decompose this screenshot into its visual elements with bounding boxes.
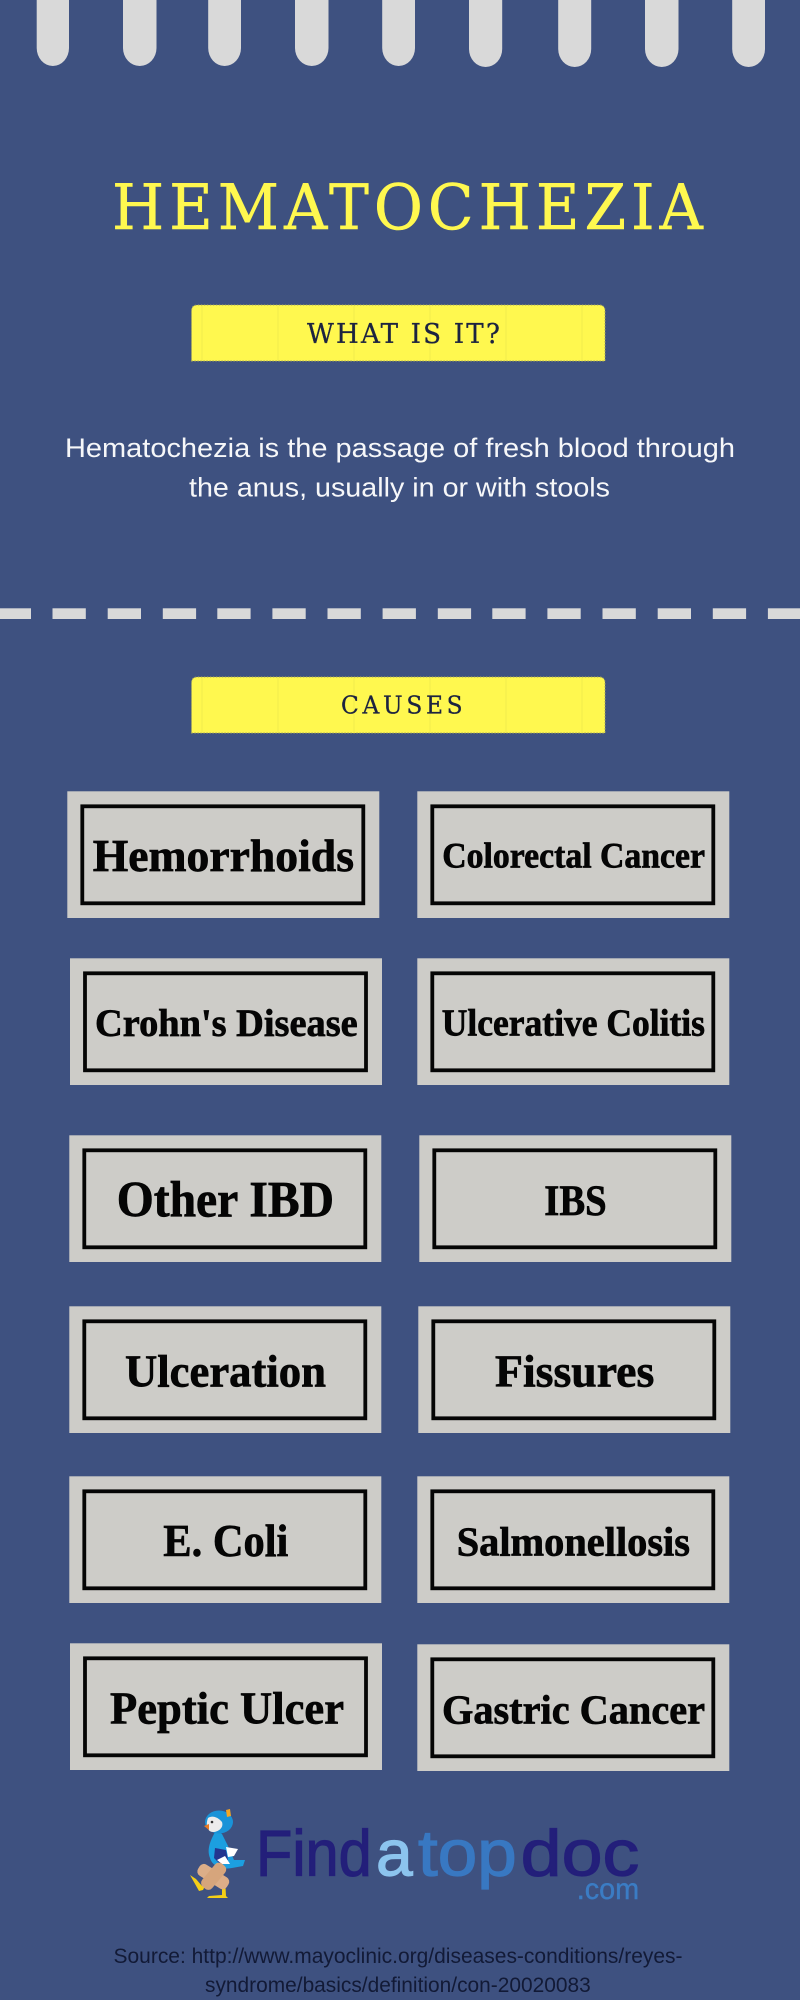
icon: bird mascot with bandage (190, 1809, 245, 1898)
card label: Salmonellosis (457, 1518, 690, 1564)
definition text: the anus, usually in or with stools (189, 472, 610, 502)
card: Ulceration (69, 1306, 381, 1433)
card label: Peptic Ulcer (110, 1682, 344, 1733)
card: Salmonellosis (417, 1476, 729, 1603)
card label: IBS (544, 1178, 607, 1225)
card label: Ulcerative Colitis (442, 1003, 705, 1045)
logo wordmark: Find (256, 1817, 372, 1890)
definition text (65, 433, 735, 502)
source citation: Source: http://www.mayoclinic.org/diseases-conditions/reyes- (114, 1945, 683, 1968)
card label: Crohn's Disease (95, 1002, 358, 1045)
card: Gastric Cancer (417, 1644, 729, 1771)
card label: Colorectal Cancer (442, 836, 705, 876)
card label: Ulceration (125, 1345, 326, 1396)
card: Colorectal Cancer (417, 791, 729, 918)
card: Crohn's Disease (70, 958, 382, 1085)
banner label: WHAT IS IT? (307, 318, 500, 350)
card label: Gastric Cancer (442, 1686, 705, 1732)
card: IBS (419, 1135, 731, 1262)
card: Hemorrhoids (67, 791, 379, 918)
logo wordmark: a (376, 1817, 414, 1890)
definition text: Hematochezia is the passage of fresh blood through (65, 433, 735, 463)
card: Ulcerative Colitis (417, 958, 729, 1085)
source citation: syndrome/basics/definition/con-20020083 (205, 1974, 591, 1997)
card label: Other IBD (117, 1173, 334, 1229)
banner: what is it (192, 305, 605, 361)
notebook binding tabs (37, 0, 765, 67)
card: Other IBD (69, 1135, 381, 1262)
card: E. Coli (69, 1476, 381, 1603)
card label: Fissures (495, 1345, 654, 1396)
logo wordmark: doc (521, 1817, 639, 1890)
card label: Hemorrhoids (93, 830, 354, 881)
logo wordmark: top (418, 1817, 517, 1890)
card: Peptic Ulcer (70, 1643, 382, 1770)
logo wordmark (256, 1817, 639, 1906)
title: HEMATOCHEZIA (112, 172, 704, 244)
source citation (114, 1945, 683, 1997)
banner: causes (192, 677, 605, 733)
logo wordmark: .com (577, 1873, 639, 1906)
banner label: CAUSES (341, 691, 463, 720)
card: Fissures (418, 1306, 730, 1433)
card label: E. Coli (163, 1515, 288, 1566)
